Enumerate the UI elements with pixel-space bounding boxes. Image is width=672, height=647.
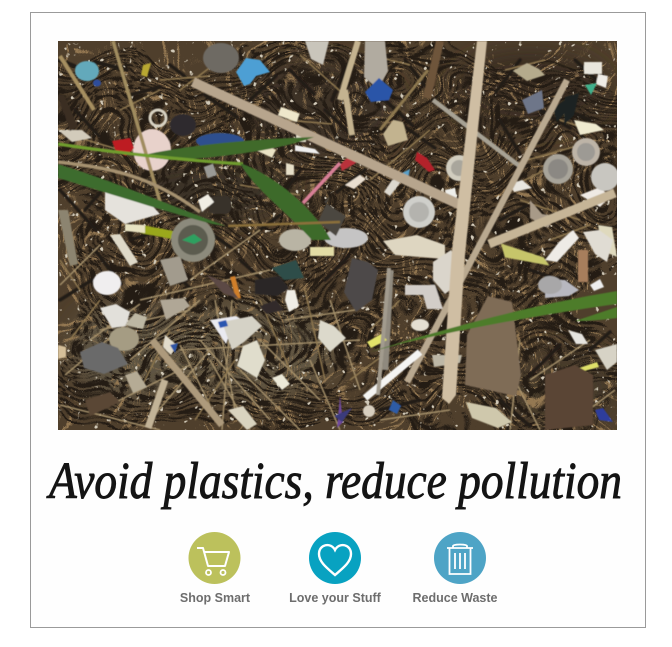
label: love your stuff: Love your Stuff	[289, 591, 382, 605]
thin reeds	[60, 230, 615, 430]
debris: plastic and paper fragments	[58, 41, 617, 430]
sticks	[58, 41, 615, 428]
tall reed stick	[442, 41, 487, 404]
caps and lids	[171, 138, 619, 294]
cardboard piece	[465, 296, 521, 396]
pink straw	[303, 163, 340, 203]
icon: trash can	[434, 532, 486, 584]
photo: plastic debris among reeds	[58, 41, 620, 430]
white-pink ball and red fragment	[112, 129, 244, 171]
action: reduce waste	[413, 532, 498, 605]
label: reduce waste: Reduce Waste	[413, 591, 498, 605]
action: shop smart	[180, 532, 251, 605]
label: shop smart: Shop Smart	[180, 591, 251, 605]
green leaves	[58, 137, 617, 352]
icon: shopping cart	[188, 532, 240, 584]
bark and twig texture	[58, 41, 617, 430]
action: love your stuff	[289, 532, 382, 605]
dark wood chips	[60, 60, 610, 426]
icon: heart	[309, 532, 361, 584]
